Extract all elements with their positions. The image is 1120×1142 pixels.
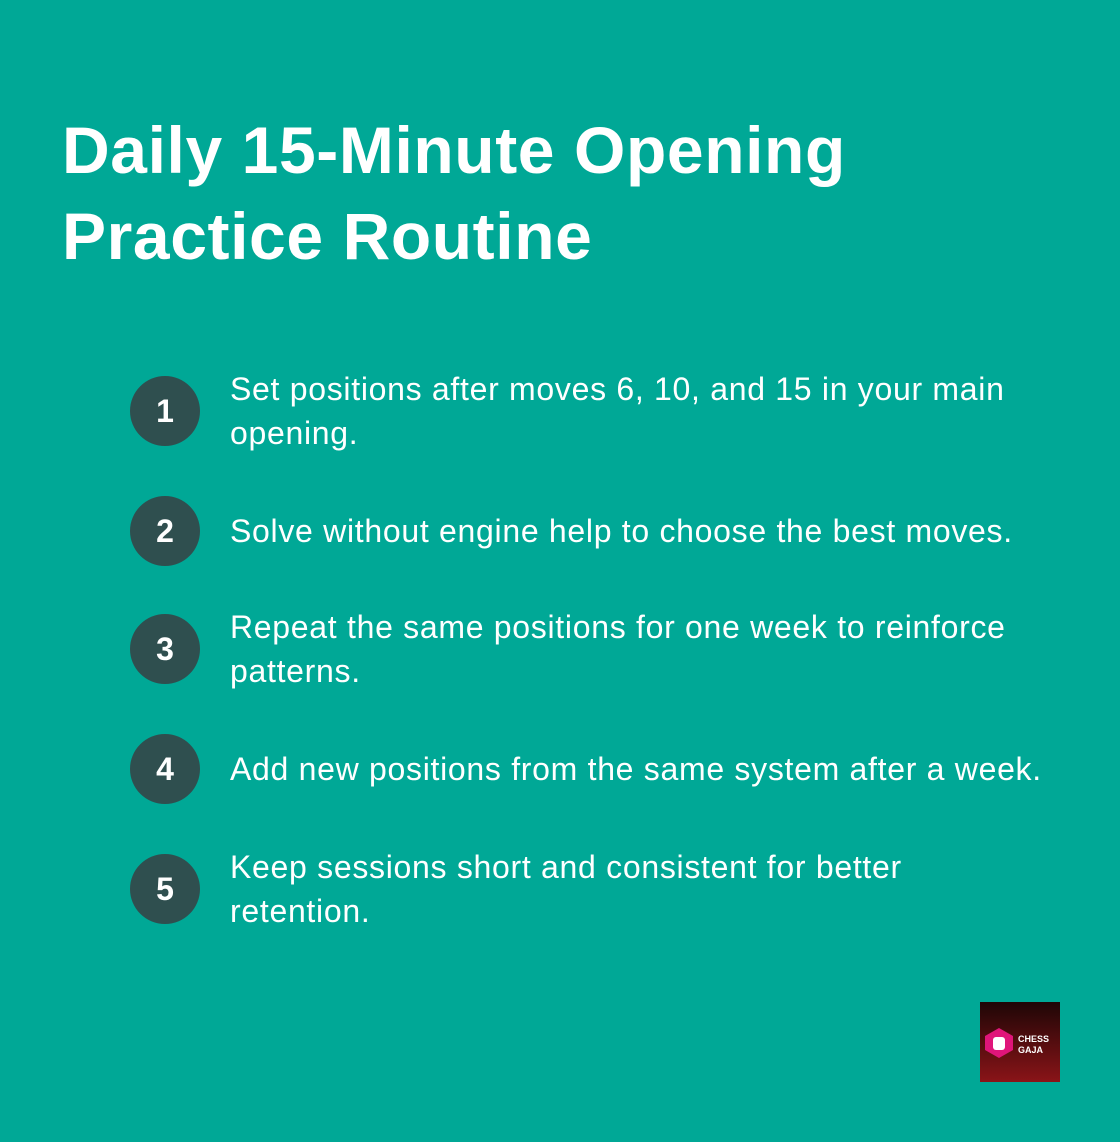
number circle 1: 1	[156, 393, 174, 429]
step 5 text: Keep sessions short and consistent for better	[230, 849, 902, 885]
step 2 text: Solve without engine help to choose the best moves.	[230, 513, 1013, 549]
logo text: CHESS	[1018, 1034, 1049, 1044]
step 4	[130, 734, 1042, 804]
number circle 2	[130, 496, 200, 566]
logo text: GAJA	[1018, 1045, 1043, 1055]
step 1 text	[230, 371, 1005, 451]
number circle 5	[130, 854, 200, 924]
step 3 text: Repeat the same positions for one week to reinforce	[230, 609, 1006, 645]
step 4 text: Add new positions from the same system after a week.	[230, 751, 1042, 787]
step 2	[130, 496, 1013, 566]
icon: hexagon elephant	[985, 1028, 1013, 1058]
number circle 4: 4	[156, 751, 174, 787]
step 5 text	[230, 849, 902, 929]
number circle 3: 3	[156, 631, 174, 667]
step 5 text: retention.	[230, 893, 370, 929]
logo text	[1018, 1034, 1049, 1055]
number circle 1	[130, 376, 200, 446]
title: Practice Routine	[62, 199, 592, 273]
number circle 5: 5	[156, 871, 174, 907]
number circle 2: 2	[156, 513, 174, 549]
number circle 4	[130, 734, 200, 804]
step 3 text	[230, 609, 1006, 689]
step 1	[130, 371, 1005, 451]
step 5	[130, 849, 902, 929]
step 3	[130, 609, 1006, 689]
step 1 text: Set positions after moves 6, 10, and 15 in your main	[230, 371, 1005, 407]
logo: chess gaja	[980, 1002, 1060, 1082]
number circle 3	[130, 614, 200, 684]
step 3 text: patterns.	[230, 653, 361, 689]
step 1 text: opening.	[230, 415, 358, 451]
title	[62, 113, 846, 273]
title: Daily 15-Minute Opening	[62, 113, 846, 187]
